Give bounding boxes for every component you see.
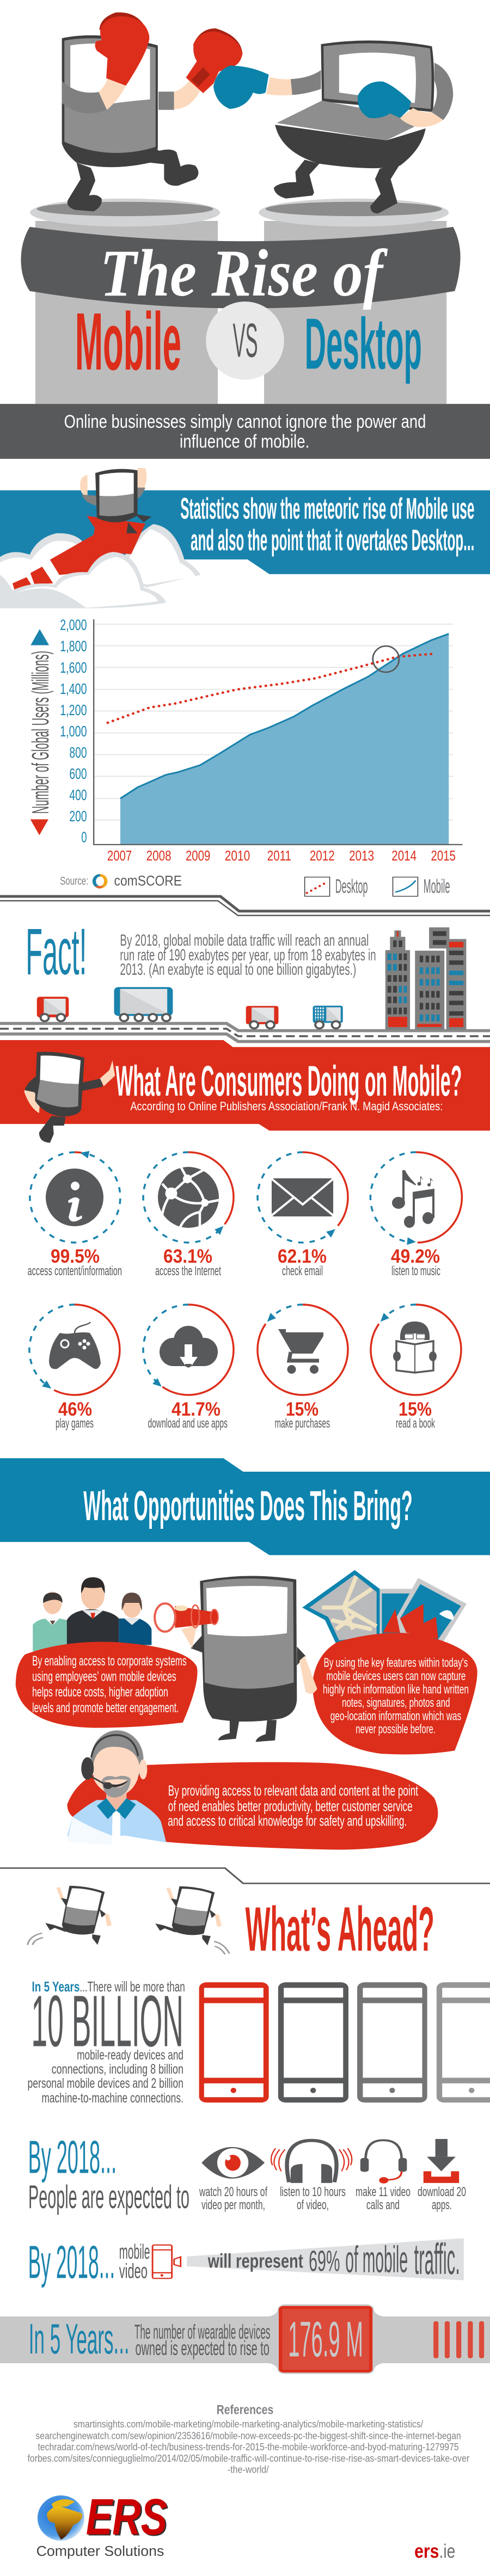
- icon: headset: [360, 2140, 407, 2184]
- x axis labels: [107, 847, 456, 864]
- text: 69% of traffic: [207, 2235, 460, 2283]
- speech bubble: corporate systems: using employees’ own mobile devices: [32, 1669, 176, 1684]
- x axis labels: 2011: [267, 847, 291, 864]
- vs circle: VS: [233, 314, 258, 367]
- projection beam: [187, 2238, 464, 2280]
- heading: [180, 492, 474, 557]
- panel: closing section: owned is expected to rise to: [136, 2338, 270, 2359]
- x axis labels: 2007: [107, 847, 132, 864]
- panel: opportunities section: [0, 1458, 490, 1849]
- logo: ERS: [36, 2489, 168, 2559]
- caption: download: [418, 2185, 466, 2212]
- y axis labels: 800: [69, 745, 87, 761]
- stat: 15% book: [371, 1305, 461, 1431]
- vs circle: [206, 302, 284, 380]
- text: 69% of traffic: will represent: [207, 2250, 303, 2272]
- panel: fact section: Fact!: [26, 915, 87, 988]
- lead-in: in 5 years: In 5 Years: [32, 1979, 79, 1995]
- caption: download: apps.: [432, 2198, 452, 2212]
- panel: hero: [0, 13, 490, 459]
- stat: 41.7% apps: download and use apps: [148, 1416, 228, 1431]
- caption: listen: [280, 2185, 346, 2212]
- x axis labels: 2009: [186, 847, 210, 864]
- x axis labels: 2008: [146, 847, 171, 864]
- y axis labels: 1,400: [60, 680, 87, 697]
- description: devices: machine-to-machine connections.: [41, 2091, 183, 2105]
- stat: 99.5% access content: access content/information: [27, 1264, 122, 1278]
- caption: watch video: [199, 2185, 267, 2212]
- panel: statistics section: Mobile: [424, 876, 450, 897]
- right pedestal top: [259, 199, 449, 226]
- x axis labels: 2014: [391, 847, 416, 864]
- legend: mobile: [393, 876, 450, 897]
- panel: closing section: By 2018...: [28, 2236, 115, 2288]
- caption: listen: listen to 10 hours: [280, 2185, 346, 2199]
- panel: hero: Mobile: [75, 296, 181, 387]
- road: [0, 1029, 490, 1042]
- stat: 15% book: read a book: [396, 1416, 436, 1431]
- phone icon: dark: [278, 1982, 348, 2102]
- panel: closing section: mobile: [119, 2241, 150, 2264]
- x axis labels: 2012: [310, 847, 335, 864]
- logo: ERS: ERS: [88, 2490, 168, 2547]
- illustration: map and photos: [302, 1570, 467, 1651]
- speech bubble: corporate systems: By enabling access to corporate systems: [32, 1653, 187, 1669]
- references: -the-world/: [228, 2464, 269, 2475]
- illustration: colleagues: [33, 1577, 151, 1651]
- strap holes: [433, 2321, 484, 2358]
- stat: 63.1% internet: access the Internet: [155, 1264, 221, 1278]
- panel: statistics section: [0, 468, 490, 897]
- logo: ERS: ERS: [86, 2489, 167, 2546]
- stat: 49.2% music: listen to music: [391, 1264, 440, 1278]
- lead-in: in 5 years: [32, 1979, 185, 1995]
- icon: eye: [201, 2147, 265, 2179]
- road divider: [0, 896, 490, 915]
- speech bubble: relevant data: [67, 1762, 438, 1849]
- y axis labels: 1,600: [60, 660, 87, 677]
- phone icon: light grey: [437, 1982, 490, 2102]
- y axis labels: [60, 617, 87, 846]
- y axis labels: 0: [81, 829, 87, 846]
- source credit: comSCORE: [114, 872, 182, 888]
- speech bubble: key features: never possible before.: [356, 1722, 436, 1736]
- fact text: [120, 931, 376, 979]
- stat: 49.2% music: 49.2%: [391, 1246, 440, 1267]
- stat: 46% games: 46%: [58, 1399, 92, 1420]
- panel: fact section: [0, 915, 490, 1143]
- stat: 41.7% apps: [143, 1305, 234, 1431]
- stat: 63.1% internet: [143, 1152, 234, 1278]
- description: devices: [28, 2048, 183, 2105]
- stat: 63.1% internet: 63.1%: [163, 1246, 212, 1267]
- character: desktop boxer: [213, 40, 453, 213]
- stat: 15% purchases: [258, 1305, 348, 1431]
- caption: calls: make 11 video: [356, 2185, 411, 2199]
- vehicle: blue: [313, 1006, 343, 1029]
- city buildings: [385, 927, 466, 1030]
- website: .ie: [439, 2540, 455, 2562]
- left pedestal top: [30, 199, 220, 226]
- vehicle: red: [246, 1006, 278, 1029]
- vehicle: blue large: [114, 987, 173, 1021]
- y axis labels: 1,800: [60, 638, 87, 655]
- stat: 62.1% email: check email: [282, 1264, 323, 1278]
- references: [28, 2402, 469, 2475]
- caption: calls: [356, 2185, 411, 2212]
- y axis labels: 2,000: [60, 617, 87, 634]
- caption: listen: of video,: [297, 2198, 329, 2212]
- watch case: [269, 2304, 383, 2374]
- y axis labels: 1,200: [60, 702, 87, 719]
- x axis labels: 2013: [349, 847, 374, 864]
- speech bubble: corporate systems: levels and promote better engagement.: [32, 1700, 179, 1716]
- website: ers: [414, 2540, 439, 2562]
- x axis labels: 2015: [431, 847, 456, 864]
- caption: download: download 20: [418, 2185, 466, 2199]
- source credit: [60, 872, 182, 888]
- character: phone with telescope: [155, 1576, 317, 1742]
- caption: calls: calls and: [366, 2198, 400, 2212]
- stat: 15% purchases: make purchases: [274, 1416, 330, 1431]
- stat: 62.1% email: [258, 1152, 348, 1278]
- caption: watch video: watch 20 hours of: [199, 2185, 267, 2199]
- description: devices: mobile-ready devices and: [77, 2048, 183, 2062]
- banner: consumers: [0, 1040, 490, 1130]
- label: mobile video: [119, 2241, 150, 2283]
- stat: 46% games: play games: [56, 1416, 94, 1431]
- description: devices: connections, including 8 billion: [52, 2061, 183, 2076]
- line chart: [27, 617, 463, 864]
- character: runner two: [155, 1886, 229, 1954]
- icon: download: [424, 2139, 459, 2183]
- intro band: influence of mobile.: [180, 431, 309, 452]
- arrow up: [30, 629, 49, 645]
- illustration: support agent: [67, 1730, 166, 1845]
- arrow down: [30, 819, 48, 835]
- lead-in: in 5 years: ...There will be more than: [79, 1979, 185, 1995]
- logo: ERS: Computer Solutions: [36, 2543, 164, 2559]
- panel: what's ahead: [0, 1868, 490, 2184]
- vehicle: red small: [37, 997, 69, 1021]
- icon: projecting phone: [152, 2245, 181, 2278]
- y axis labels: 200: [69, 808, 87, 825]
- icon: headphones: [271, 2141, 352, 2183]
- caption: watch video: video per month,: [201, 2198, 265, 2212]
- character: mobile boxer: [62, 13, 242, 211]
- stat: 41.7% apps: 41.7%: [171, 1399, 220, 1420]
- y axis labels: 400: [69, 787, 87, 804]
- title: The Rise of: [100, 236, 388, 310]
- stat: 62.1% email: 62.1%: [278, 1246, 327, 1267]
- text: People are expected to: [28, 2179, 189, 2215]
- source credit: Source:: [60, 874, 88, 887]
- text: 69% of traffic: 69%: [309, 2245, 340, 2277]
- text: wearables: [134, 2321, 271, 2359]
- y axis labels: 600: [69, 765, 87, 782]
- legend: desktop: [305, 876, 368, 897]
- stat: 99.5% access content: 99.5%: [51, 1246, 100, 1267]
- title ribbon: [21, 227, 461, 309]
- speech bubble: key features: [313, 1633, 477, 1754]
- stat: 15% book: 15%: [399, 1399, 432, 1420]
- stat: 46% games: [29, 1305, 120, 1431]
- stat: 99.5% access content: [27, 1149, 122, 1278]
- panel: closing section: [0, 2235, 490, 2562]
- panel: what's ahead: By 2018...: [28, 2131, 117, 2183]
- illustration: rocket and clouds: [0, 468, 201, 608]
- stat: 15% purchases: 15%: [286, 1399, 318, 1420]
- panel: closing section: video: [119, 2260, 148, 2283]
- panel: closing section: In 5 Years...: [29, 2315, 130, 2363]
- speech bubble: corporate systems: [16, 1641, 198, 1728]
- character: runner one: [28, 1886, 112, 1945]
- character: phone leaning on heading: [24, 1052, 115, 1143]
- intro band: [0, 404, 490, 459]
- stat: 49.2% music: [370, 1152, 462, 1278]
- references: References: [217, 2402, 273, 2417]
- x axis labels: 2010: [225, 847, 250, 864]
- axis title: Number of Global Users (Millions): [27, 651, 53, 814]
- panel: statistics section: Desktop: [335, 876, 368, 897]
- y axis labels: 1,000: [60, 723, 87, 740]
- phone icon: red: [199, 1982, 269, 2102]
- description: devices: personal mobile devices and 2 billion: [28, 2075, 183, 2091]
- speech bubble: corporate systems: helps reduce costs, higher adoption: [32, 1684, 168, 1700]
- phone icon: mid grey: [357, 1982, 427, 2102]
